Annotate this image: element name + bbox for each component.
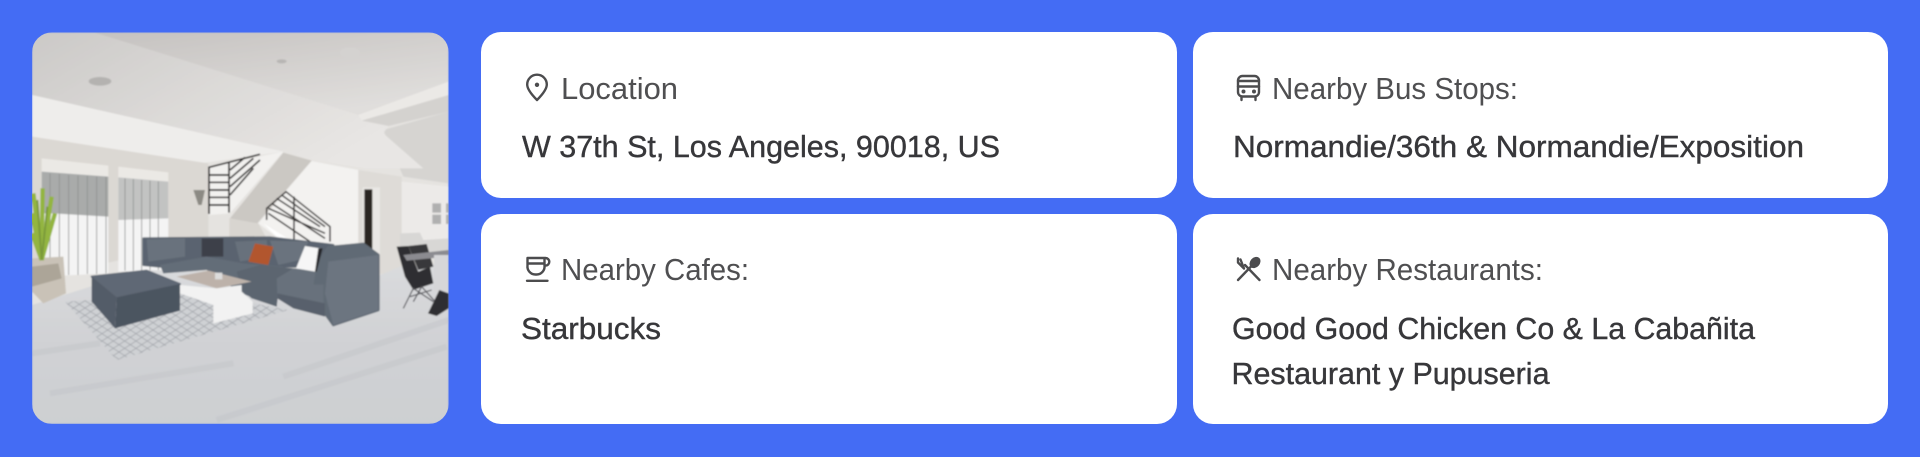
icon: fork and spoon bbox=[1238, 256, 1261, 280]
label: Nearby Bus Stops: Nearby Bus Stops: bbox=[1272, 71, 1518, 106]
value: cafes: Starbucks bbox=[521, 311, 661, 346]
ottoman bbox=[92, 271, 180, 297]
coffee table bbox=[177, 271, 252, 288]
chair and plant bbox=[32, 257, 66, 303]
label: Nearby Cafes: Nearby Cafes: bbox=[561, 252, 749, 287]
panel: nearby bus stops bbox=[1193, 32, 1888, 198]
dining chairs and table bbox=[397, 246, 433, 290]
icon: coffee cup bbox=[527, 258, 549, 281]
label: Location: Location bbox=[561, 71, 678, 106]
panel: nearby restaurants bbox=[1193, 214, 1888, 424]
value: restaurants bbox=[1232, 311, 1756, 391]
value: address: W 37th St, Los Angeles, 90018, US bbox=[522, 129, 1000, 164]
panel: nearby cafes bbox=[481, 214, 1177, 424]
sectional sofa bbox=[143, 237, 333, 267]
panel: location bbox=[481, 32, 1177, 198]
value: restaurants: Restaurant y Pupuseria bbox=[1232, 356, 1550, 391]
value: restaurants: Good Good Chicken Co & La Cabañita bbox=[1232, 311, 1756, 346]
value: bus stops: Normandie/36th & Normandie/Exposition bbox=[1233, 129, 1804, 164]
stair railings bbox=[209, 154, 260, 214]
photo: living room with grey sectional sofa bbox=[32, 32, 449, 424]
floor bbox=[32, 263, 449, 424]
cushions bbox=[248, 243, 273, 265]
icon: bus bbox=[1238, 76, 1259, 100]
rug bbox=[65, 293, 288, 360]
card background bbox=[481, 214, 1177, 424]
card background bbox=[481, 32, 1177, 198]
card background bbox=[1193, 32, 1888, 198]
label: Nearby Restaurants: Nearby Restaurants: bbox=[1272, 252, 1543, 287]
card background bbox=[1193, 214, 1888, 424]
icon: map pin bbox=[527, 75, 547, 100]
